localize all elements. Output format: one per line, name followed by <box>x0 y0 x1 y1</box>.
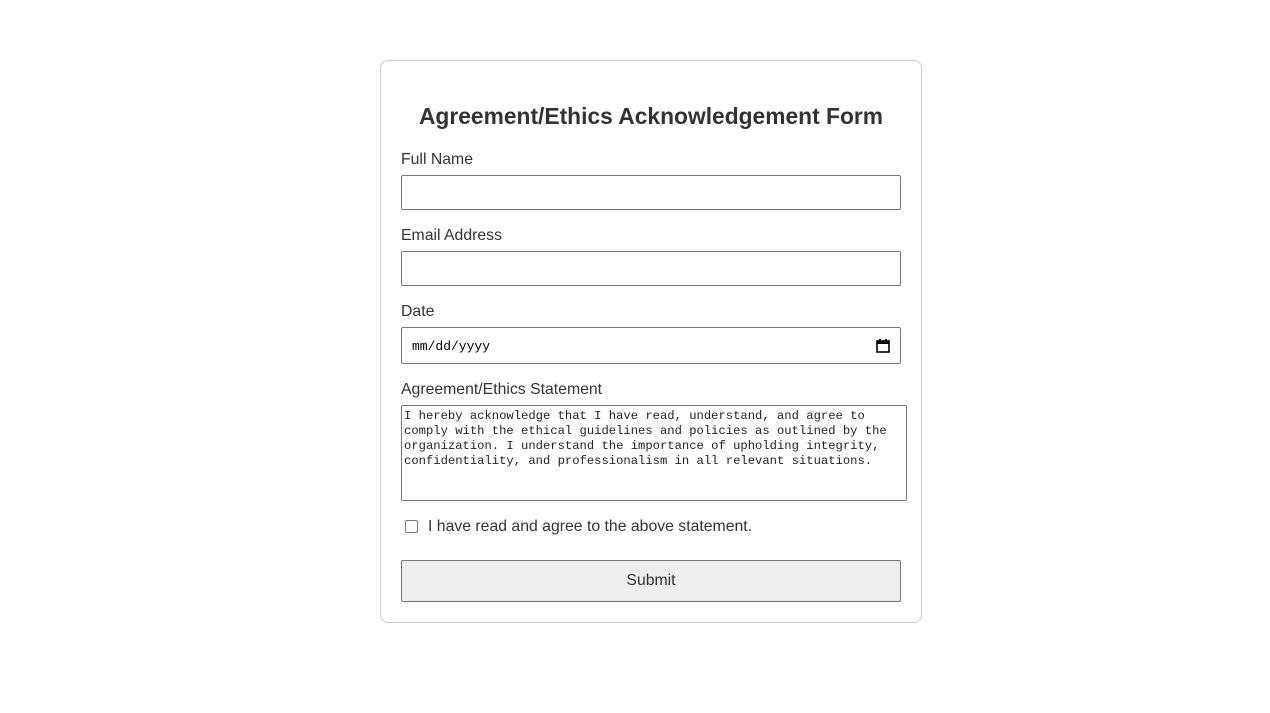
icon: calendar <box>876 339 890 353</box>
label: full name: Full Name <box>401 151 473 168</box>
button: submit <box>401 560 901 602</box>
checkbox <box>405 520 418 533</box>
panel: form card <box>380 60 922 623</box>
textarea: statement: I hereby acknowledge that I have read, understand, and agree to comply with the ethical guidelines and policies as outlined by the organization. I understand the importance of upholding integrity, confidentiality, and professionalism in all relevant situations. <box>404 409 887 468</box>
textarea: statement <box>401 405 907 501</box>
label: email: Email Address <box>401 227 502 244</box>
title: Agreement/Ethics Acknowledgement Form <box>419 103 883 129</box>
label: date: Date <box>401 303 434 320</box>
input: email <box>401 251 901 286</box>
button: submit: Submit <box>626 572 676 589</box>
label: statement: Agreement/Ethics Statement <box>401 381 602 398</box>
input: date: mm/dd/yyyy <box>412 339 490 354</box>
input: full name <box>401 175 901 210</box>
checkbox label: I have read and agree to the above statement. <box>428 518 752 535</box>
input: date <box>401 327 901 364</box>
